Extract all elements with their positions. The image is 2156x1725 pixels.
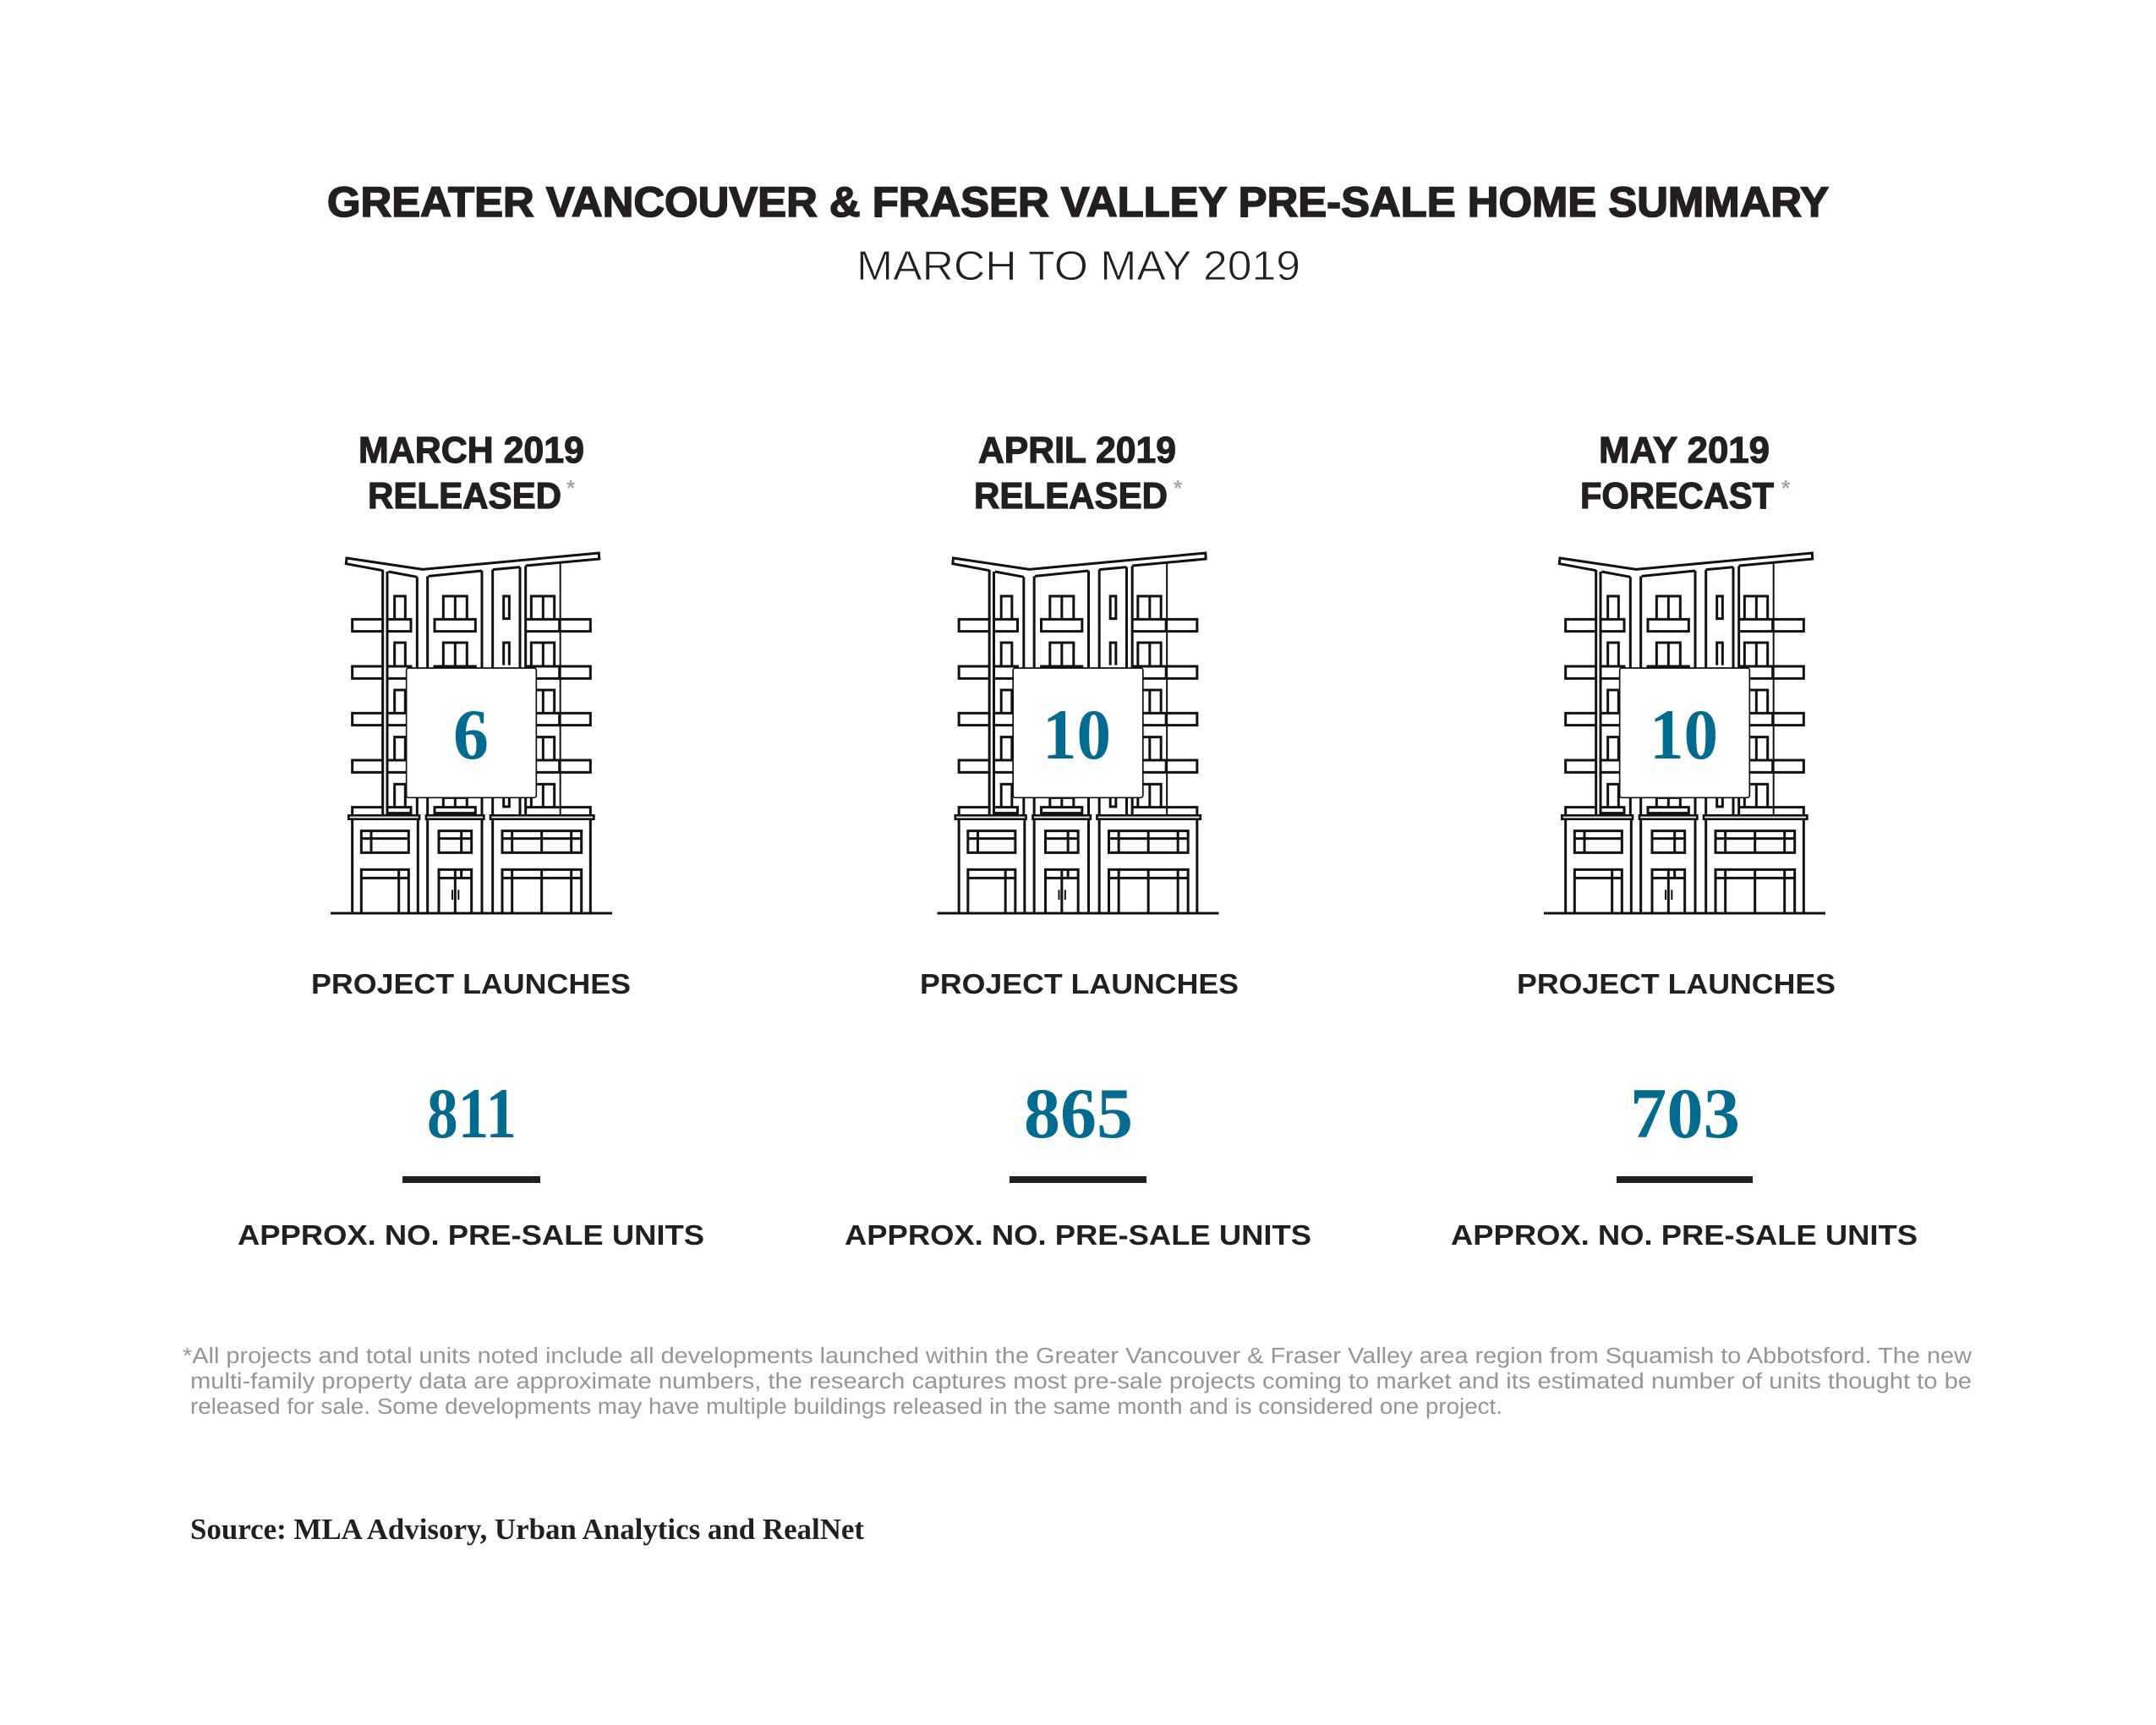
number: 865 units: 865 [1024,1074,1133,1153]
label: approx units: APPROX. NO. PRE-SALE UNITS [845,1220,1311,1251]
rule [1010,1176,1146,1183]
label: approx units: APPROX. NO. PRE-SALE UNITS [1451,1220,1918,1251]
footnote: released for sale. Some developments may have multiple buildings released in the same month and is considered one project. [190,1395,1502,1419]
heading: May 2019 forecast: MAY 2019 [1599,430,1770,471]
heading: March 2019 released [358,430,584,517]
label: project launches: PROJECT LAUNCHES [311,969,631,1000]
footnote [183,1344,1973,1419]
heading: March 2019 released: MARCH 2019 [358,430,584,471]
heading: May 2019 forecast: * [1781,475,1791,501]
title: GREATER VANCOUVER & FRASER VALLEY PRE-SALE HOME SUMMARY [327,178,1829,226]
heading: April 2019 released: APRIL 2019 [978,430,1176,471]
rule [1617,1176,1753,1183]
icon: building with project launches count [331,553,612,914]
panel: May 2019 [1451,430,1918,1251]
source line: Source: MLA Advisory, Urban Analytics and RealNet [190,1513,864,1546]
number: 703 units: 703 [1630,1074,1740,1153]
heading: April 2019 released [974,430,1183,517]
number: 811 units: 811 [427,1074,517,1153]
label: project launches: PROJECT LAUNCHES [920,969,1239,1000]
panel: April 2019 [845,430,1311,1251]
label: project launches: PROJECT LAUNCHES [1517,969,1836,1000]
heading: March 2019 released: * [566,475,576,501]
number: 6 project launches: 6 [453,695,489,775]
number: 10 project launches: 10 [1042,695,1111,775]
heading: May 2019 forecast [1580,430,1791,517]
panel: March 2019 [238,430,704,1251]
rule [402,1176,540,1183]
heading: May 2019 forecast: FORECAST [1580,476,1774,517]
heading: March 2019 released: RELEASED [368,476,561,517]
label: approx units: APPROX. NO. PRE-SALE UNITS [238,1220,704,1251]
icon: building with project launches count [1544,553,1825,914]
icon: building with project launches count [937,553,1218,914]
footnote: *All projects and total units noted include all developments launched within the Greater Vancouver & Fraser Valley area region from Squamish to Abbotsford. The new [183,1344,1973,1368]
number: 10 project launches: 10 [1650,695,1718,775]
heading: April 2019 released: * [1174,475,1183,501]
heading: April 2019 released: RELEASED [974,476,1168,517]
footnote: multi-family property data are approximate numbers, the research captures most pre-sale projects coming to market and its estimated number of units thought to be [190,1370,1972,1394]
subtitle: MARCH TO MAY 2019 [856,244,1300,289]
